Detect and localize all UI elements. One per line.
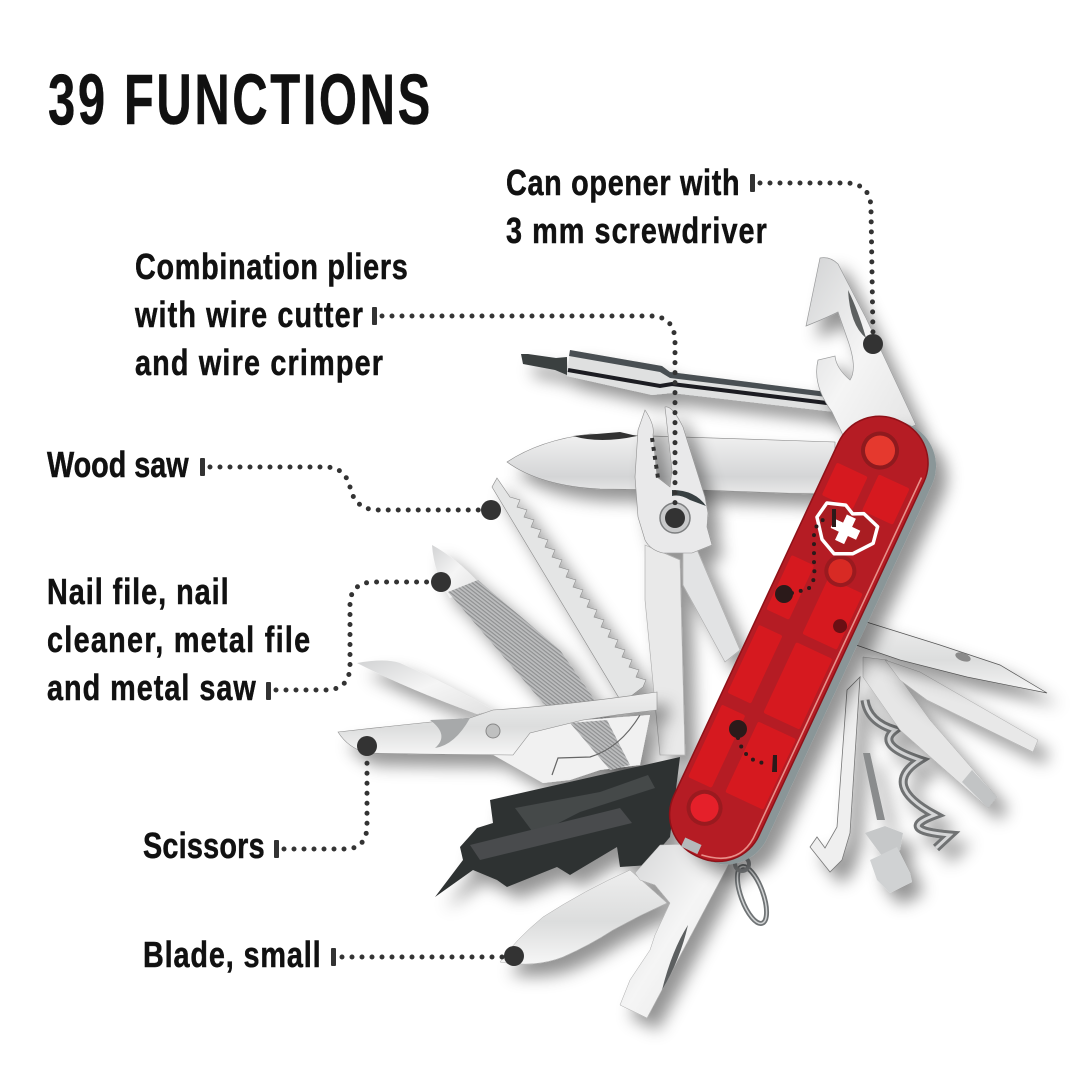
label: can opener: [506, 162, 767, 251]
tool: wood saw: [492, 478, 646, 703]
pivots: [683, 425, 928, 845]
tool: pliers: [635, 407, 740, 755]
label: nail file: cleaner, metal file: [47, 619, 310, 660]
label: pliers: with wire cutter: [134, 294, 363, 335]
tool: flat tool: [885, 660, 1038, 752]
label: pliers: [134, 246, 408, 383]
label: nail file: and metal saw: [47, 667, 256, 708]
tool: scissors: [338, 660, 657, 783]
leader: small blade: [331, 946, 524, 966]
knife side layers: [663, 404, 951, 879]
leader: can opener: [750, 174, 883, 354]
logo: cross and shield: [806, 496, 883, 567]
keyring: [731, 857, 773, 927]
callout marks on body: [729, 509, 836, 772]
tool: can opener with screwdriver: [806, 258, 916, 450]
tool: nail file: [432, 545, 630, 770]
tool: corkscrew: [865, 700, 950, 848]
label: can opener: Can opener with: [506, 162, 740, 203]
leader: pliers: [372, 307, 685, 528]
label: scissors: Scissors: [143, 825, 265, 866]
label: pliers: Combination pliers: [135, 246, 408, 287]
label: pliers: and wire crimper: [135, 342, 383, 383]
leader: nail file: [266, 572, 451, 700]
tool: screwdriver blade: [863, 657, 997, 808]
tool: hook: [810, 677, 860, 872]
inner panels: [688, 455, 912, 812]
tool: long blade: [856, 620, 1047, 693]
tool: mini screwdriver: [863, 753, 912, 893]
label: nail file: [47, 571, 310, 708]
leader: scissors: [274, 736, 377, 858]
knife body: [655, 401, 943, 876]
tool: large blade: [507, 432, 835, 495]
label: small blade: Blade, small: [143, 934, 321, 975]
tool: black bit holder: [435, 757, 680, 897]
tool: screwdriver rod: [521, 350, 835, 412]
label: can opener: 3 mm screwdriver: [506, 210, 767, 251]
title: 39 FUNCTIONS: [48, 60, 430, 139]
leader: wood saw: [200, 458, 501, 520]
label: nail file: Nail file, nail: [47, 571, 229, 612]
label: wood saw: Wood saw: [47, 444, 189, 485]
tool: small blade and lower opener: [500, 843, 730, 1018]
